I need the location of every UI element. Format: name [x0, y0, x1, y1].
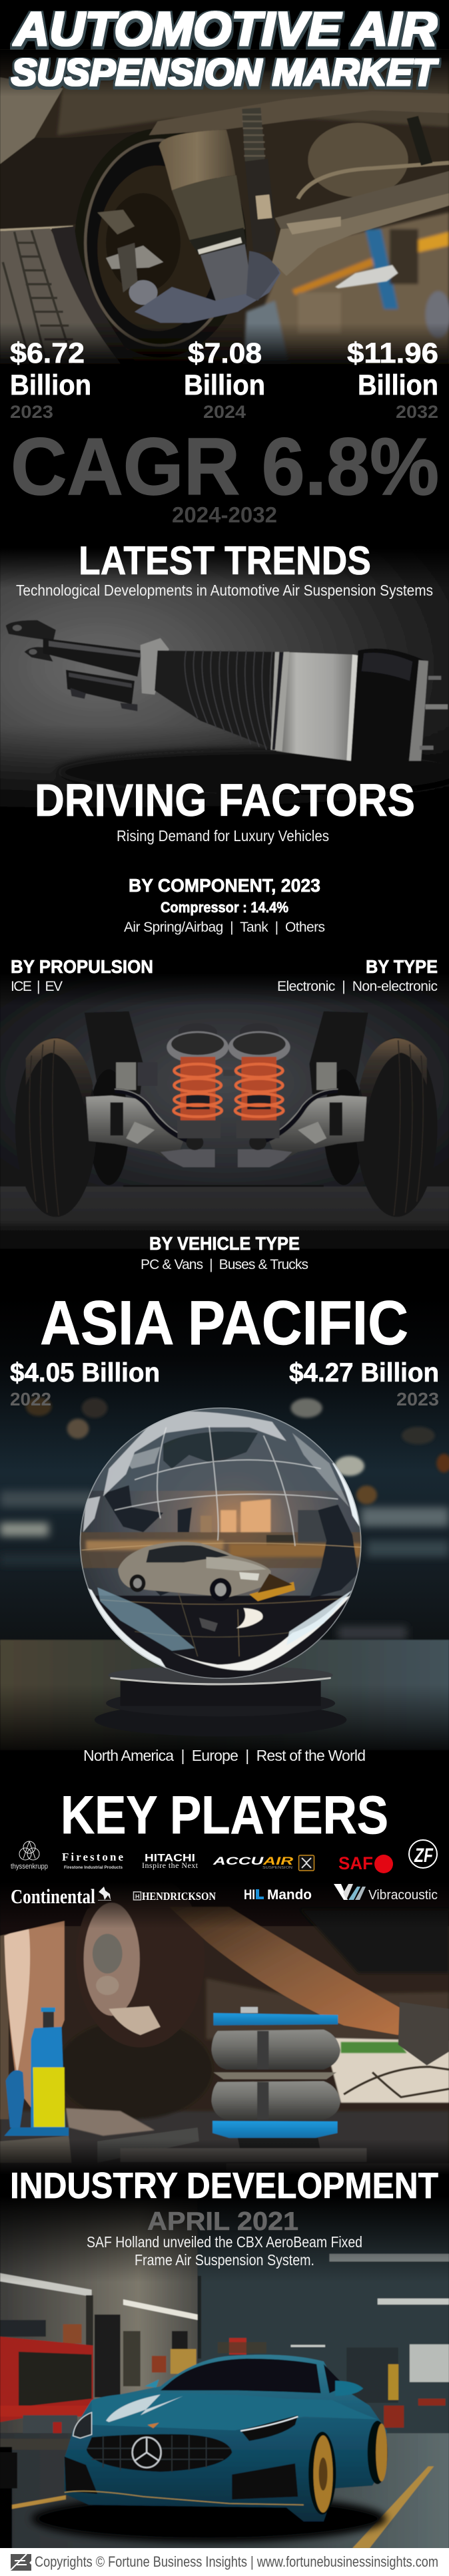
logo: saf [338, 1853, 393, 1873]
logo: thyssenkrupp [11, 1841, 48, 1871]
panel: industry development [0, 2165, 449, 2549]
stat: 2032 value: $11.96 [347, 337, 438, 369]
logo: zf [409, 1840, 437, 1868]
stat: asia pacific 2023: $4.27 Billion [289, 1358, 439, 1387]
text: development description: SAF Holland unveiled the CBX AeroBeam Fixed [87, 2233, 362, 2251]
title: SUSPENSION MARKET [11, 51, 438, 94]
stat: asia pacific 2023 [289, 1358, 439, 1409]
logo: hitachi [142, 1853, 199, 1870]
stat: 2024 value: $7.08 [188, 337, 262, 369]
photo: air strut [0, 543, 449, 819]
segment: by vehicle type: PC & Vans | Buses & Trucks [141, 1257, 308, 1272]
segment: by propulsion: BY PROPULSION [11, 956, 153, 977]
segment: by component [124, 875, 325, 935]
logo: firestone: Firestone Industrial Products [64, 1865, 123, 1870]
stat: 2023 value: Billion [10, 369, 91, 401]
text: other regions: North America | Europe | Rest of the World [83, 1747, 366, 1764]
logo: mando: Mando [267, 1887, 312, 1903]
text: driving factor: Rising Demand for Luxury Vehicles [117, 827, 329, 844]
heading: key players: KEY PLAYERS [61, 1785, 388, 1845]
heading: driving factors: DRIVING FACTORS [35, 775, 415, 826]
segment: by type [277, 956, 438, 994]
segment: by propulsion: ICE | EV [11, 979, 63, 994]
segment: by vehicle type [141, 1233, 308, 1272]
photo: mechanic and air jack [0, 1890, 449, 2171]
logo: continental: Continental [11, 1885, 95, 1908]
panel: key players [0, 1747, 449, 2205]
logo: hitachi: Inspire the Next [142, 1861, 199, 1870]
segment: by component: Compressor : 14.4% [161, 899, 288, 916]
stat: 2024 value [184, 337, 265, 422]
stat: 2023 value: 2023 [10, 402, 53, 422]
title [11, 3, 438, 94]
icon: fortune business insights logo [11, 2554, 31, 2571]
logo: mando [244, 1887, 312, 1903]
stat: 2024 value: 2024 [203, 402, 246, 422]
logo: accuair: ACCU AIR [212, 1855, 294, 1867]
photo: suspension assembly [0, 973, 449, 1261]
stat: 2023 value [10, 337, 91, 422]
date: april 2021: APRIL 2021 [147, 2207, 298, 2236]
segment: by component: BY COMPONENT, 2023 [129, 875, 320, 896]
logo: vibracoustic: Vibracoustic [368, 1888, 438, 1903]
logo: zf: ZF [414, 1845, 434, 1867]
panel: latest trends [0, 538, 449, 819]
photo: teal sports car in garage [0, 2196, 449, 2549]
logo: mando: HI [244, 1887, 255, 1903]
stat: CAGR: CAGR 6.8% [11, 421, 439, 512]
stat: CAGR: 2024-2032 [172, 502, 277, 527]
photo: glass globe with car [0, 1298, 449, 1761]
logo: hendrickson: H [135, 1893, 140, 1900]
stand [95, 1703, 346, 1736]
segment: by vehicle type: BY VEHICLE TYPE [149, 1233, 300, 1254]
panel: asia pacific [0, 1288, 449, 1761]
text: development description [87, 2233, 362, 2269]
panel: market size hero [0, 3, 449, 527]
text: development description: Frame Air Suspension System. [135, 2251, 314, 2269]
segment: by type: Electronic | Non-electronic [277, 979, 438, 994]
logo: accuair: SUSPENSION [262, 1866, 293, 1870]
logo: hitachi: HITACHI [145, 1853, 195, 1864]
stat: 2023 value: $6.72 [10, 337, 85, 369]
stat: asia pacific 2022: 2022 [10, 1389, 51, 1409]
logo: saf: SAF [338, 1853, 373, 1873]
segment: by component: Air Spring/Airbag | Tank | Others [124, 920, 325, 935]
stat: asia pacific 2022 [10, 1358, 160, 1409]
logo: firestone: Firestone [62, 1851, 123, 1863]
logo: thyssenkrupp: thyssenkrupp [11, 1863, 48, 1871]
logo: firestone [62, 1851, 123, 1870]
stat: 2032 value: 2032 [396, 402, 438, 422]
stat: asia pacific 2022: $4.05 Billion [10, 1358, 160, 1387]
panel: segmentation [0, 875, 449, 1272]
logo: accuair [212, 1855, 314, 1871]
logo: hendrickson: HENDRICKSON [142, 1890, 217, 1903]
title: AUTOMOTIVE AIR [13, 3, 437, 56]
panel: driving factors [35, 775, 415, 844]
segment: by propulsion [11, 956, 153, 994]
heading: latest trends: LATEST TRENDS [79, 538, 371, 583]
stat: 2032 value: Billion [358, 369, 438, 401]
stat: 2032 value [347, 337, 438, 422]
stat: 2024 value: Billion [184, 369, 265, 401]
footer [0, 2548, 449, 2576]
segment: by type: BY TYPE [366, 956, 438, 977]
logo: vibracoustic [334, 1884, 438, 1903]
photo: air spring under a car [0, 50, 449, 367]
stat: asia pacific 2023: 2023 [396, 1389, 439, 1409]
heading: asia pacific: ASIA PACIFIC [40, 1288, 408, 1358]
